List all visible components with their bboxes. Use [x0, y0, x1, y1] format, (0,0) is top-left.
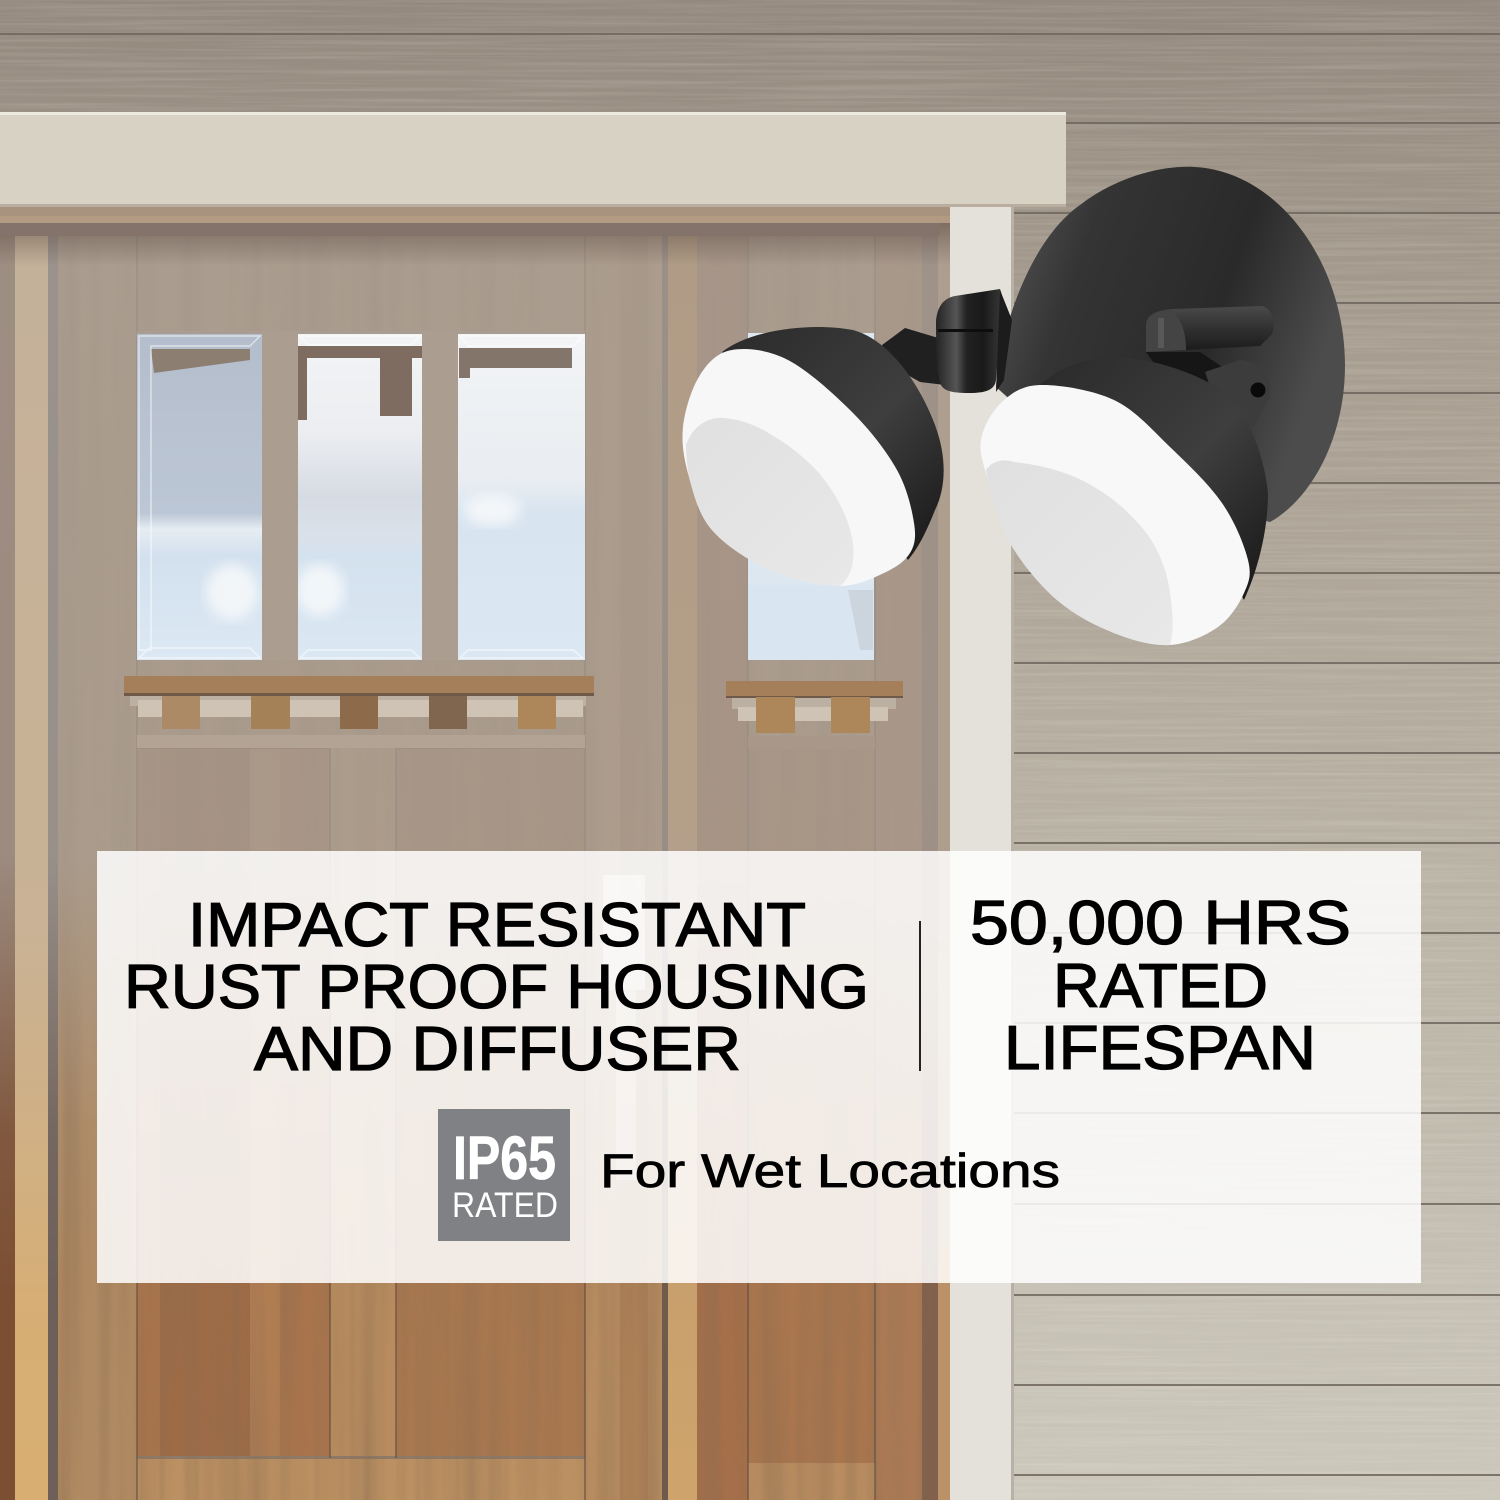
right lamp head	[980, 357, 1268, 645]
door panel edge lines	[137, 236, 875, 1500]
feature text: lifespan: RATED	[1053, 952, 1268, 1021]
icon: IP65 rated badge	[438, 1109, 570, 1241]
icon: IP65 rated badge: RATED	[452, 1186, 558, 1225]
door jamb and mullion	[15, 236, 697, 1500]
sidelight window	[748, 333, 874, 660]
right arm	[1146, 306, 1274, 428]
main door shelf and blocks	[124, 676, 594, 748]
right inner lens	[986, 460, 1173, 645]
left diffuser	[682, 349, 915, 586]
left arm elbow	[882, 289, 1012, 393]
sidelight shelf and blocks	[726, 681, 903, 749]
left lamp head	[682, 327, 944, 586]
mount screw hole	[1250, 382, 1266, 398]
cream header beam	[0, 112, 1066, 207]
left housing	[722, 327, 944, 560]
translucent info panel	[97, 851, 1421, 1283]
wall backplate	[996, 167, 1345, 522]
feature text: lifespan: 50,000 HRS	[970, 889, 1351, 958]
right diffuser	[980, 385, 1250, 645]
door assembly	[0, 207, 950, 1500]
feature text: lifespan: LIFESPAN	[1004, 1014, 1316, 1083]
main door window	[137, 331, 585, 660]
feature text: impact resistant	[124, 891, 869, 1084]
divider	[919, 921, 921, 1071]
door wood base	[0, 207, 950, 1500]
wet location label: For Wet Locations	[600, 1144, 1060, 1197]
feature text: impact resistant: RUST PROOF HOUSING	[124, 953, 869, 1022]
header shadow	[0, 222, 950, 266]
right housing	[1040, 357, 1268, 600]
header trim	[0, 207, 950, 236]
feature text: impact resistant: AND DIFFUSER	[254, 1015, 741, 1084]
feature text: lifespan	[970, 889, 1351, 1083]
icon: IP65 rated badge: IP65	[453, 1124, 556, 1192]
white door trim column	[950, 207, 1014, 1500]
light fixture	[682, 167, 1345, 645]
left inner lens	[686, 418, 854, 586]
fading overlay on upper door	[0, 207, 950, 1290]
feature text: impact resistant: IMPACT RESISTANT	[188, 891, 806, 960]
